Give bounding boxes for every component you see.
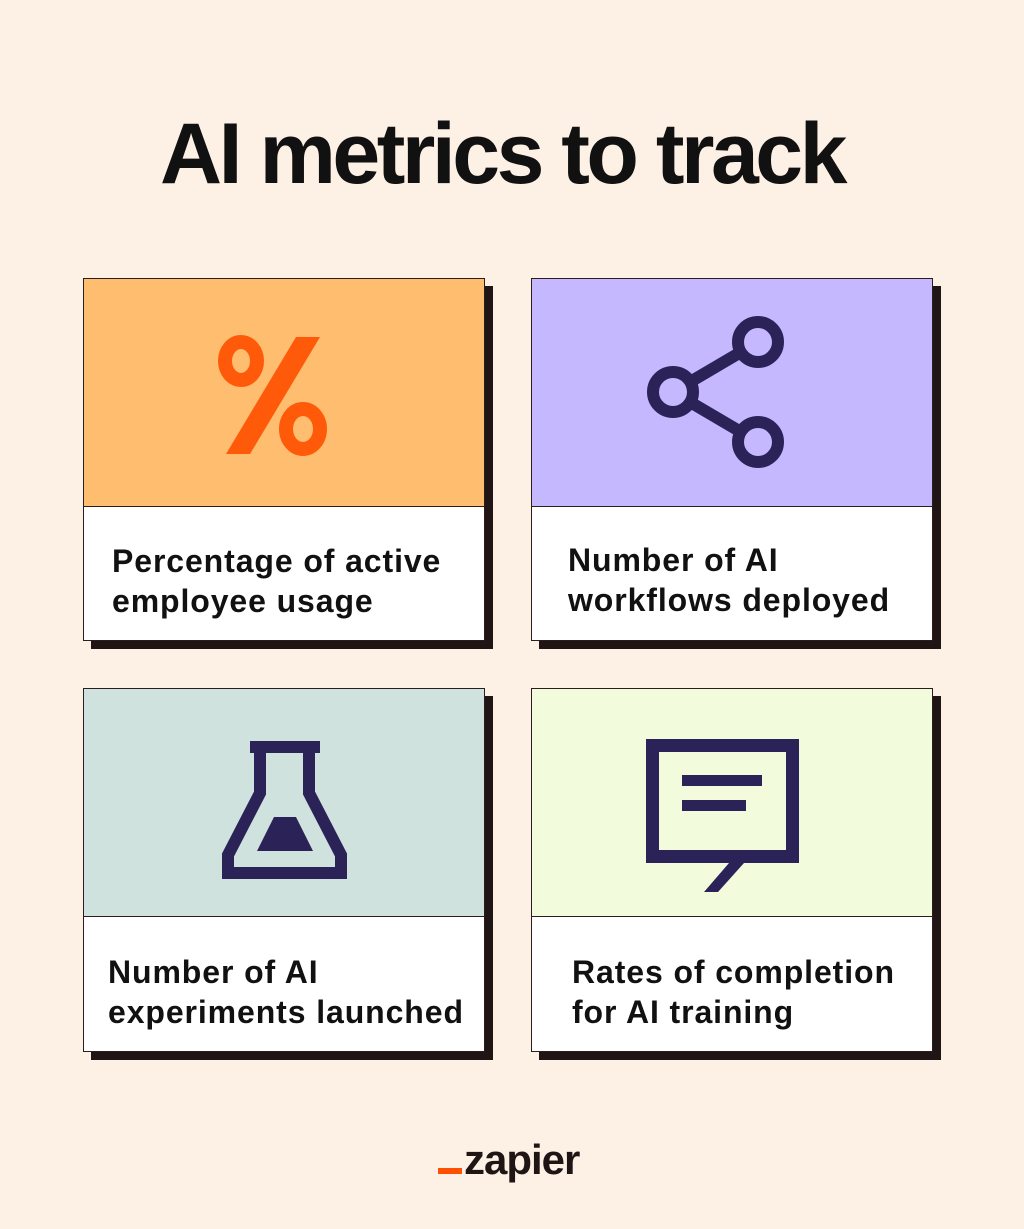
panel: active employee usage (83, 278, 485, 641)
text (108, 954, 464, 1030)
title: AI metrics to track (160, 106, 844, 202)
icon panel: chat (532, 689, 932, 917)
panel: training completion (531, 688, 933, 1052)
icon panel: percent (84, 279, 484, 507)
text (112, 543, 441, 619)
icon panel: share (532, 279, 932, 507)
text: Number of AI (108, 954, 319, 990)
text: Rates of completion (572, 954, 895, 990)
icon: percent (218, 335, 327, 456)
icon: share (647, 316, 784, 468)
text (572, 954, 895, 1030)
text: workflows deployed (568, 582, 890, 618)
text (568, 542, 890, 618)
text: for AI training (572, 994, 794, 1030)
panel: experiments launched (83, 688, 485, 1052)
text: employee usage (112, 583, 374, 619)
text: Number of AI (568, 542, 779, 578)
icon: chat bubble (646, 739, 799, 892)
panel: workflows deployed (531, 278, 933, 641)
icon panel: flask (84, 689, 484, 917)
text: Percentage of active (112, 543, 441, 579)
icon: flask (222, 741, 347, 879)
text: experiments launched (108, 994, 464, 1030)
logo: zapier: zapier (464, 1136, 579, 1183)
